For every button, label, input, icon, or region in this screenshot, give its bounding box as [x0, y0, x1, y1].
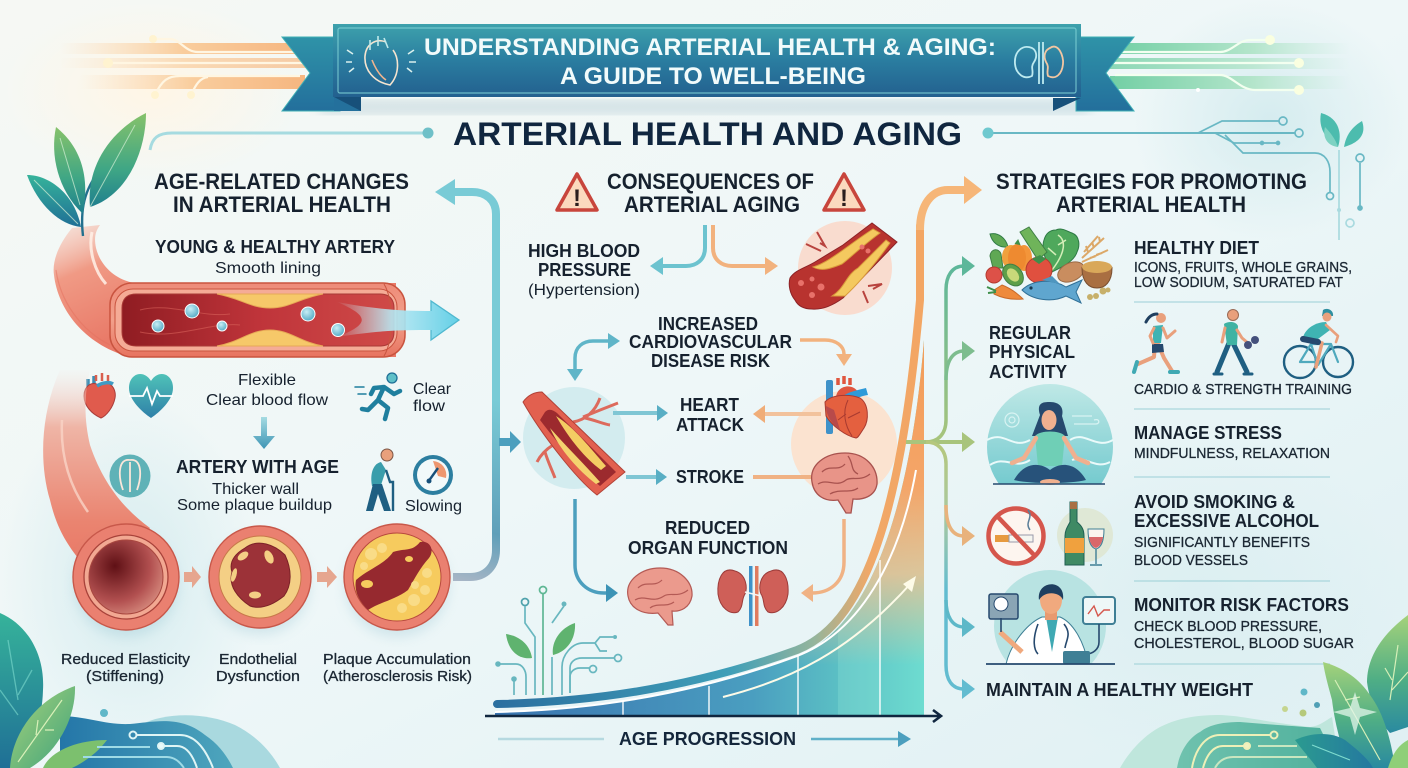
cross-section: endothelial dysfunction	[209, 526, 311, 635]
icon: green sprout	[27, 113, 146, 236]
monitor risk factors text	[1134, 595, 1354, 652]
increased cvd risk text: CARDIOVASCULAR	[629, 332, 792, 352]
reduced organ function text	[628, 518, 788, 558]
dark teal leaf	[0, 613, 43, 768]
circuit decoration top right	[982, 117, 1364, 240]
monitor risk factors text: CHOLESTEROL, BLOOD SUGAR	[1134, 635, 1354, 652]
icon: warning right	[824, 174, 864, 212]
healthy diet text: HEALTHY DIET	[1134, 238, 1259, 258]
cross-section captions: Reduced Elasticity	[61, 651, 191, 668]
title banner: A GUIDE TO WELL-BEING	[560, 63, 866, 90]
avoid smoking text: SIGNIFICANTLY BENEFITS	[1134, 534, 1310, 551]
panel heading: IN ARTERIAL HEALTH	[173, 192, 391, 217]
artery with age text: ARTERY WITH AGE	[176, 457, 339, 477]
arrow: changes back up to heading	[435, 179, 496, 577]
cross-section: plaque accumulation	[344, 524, 450, 637]
title banner	[282, 24, 1134, 114]
arrow: to high blood pressure	[650, 225, 705, 275]
cross-section captions: Dysfunction	[216, 668, 300, 685]
arrow: down to artery with age	[253, 417, 275, 449]
monitor risk factors text: MONITOR RISK FACTORS	[1134, 595, 1349, 615]
left glowing rays	[60, 35, 310, 99]
panel heading: CONSEQUENCES OF	[607, 169, 814, 194]
icon: no smoking	[988, 508, 1044, 564]
icon: small heart	[84, 373, 115, 418]
icon: heart with pulse	[129, 374, 173, 418]
apple	[986, 267, 1002, 283]
regular physical activity text: REGULAR	[989, 323, 1071, 343]
age progression label: AGE PROGRESSION	[619, 729, 796, 749]
icon: doctor monitoring	[986, 570, 1116, 665]
decoration: bottom right foliage	[1120, 615, 1408, 768]
icon: small teal leaves top right	[1320, 113, 1363, 147]
flexible text: Clear blood flow	[206, 392, 328, 409]
panel heading	[996, 169, 1307, 217]
tomato	[1026, 257, 1052, 283]
artery with age text: Some plaque buildup	[177, 497, 332, 514]
arrows: artery to heart attack and stroke	[613, 405, 668, 485]
banner title text: UNDERSTANDING ARTERIAL HEALTH & AGING:	[424, 34, 996, 61]
cross-section captions: (Atherosclerosis Risk)	[323, 668, 472, 685]
icon: warning left: !	[573, 185, 581, 212]
avoid smoking text: BLOOD VESSELS	[1134, 552, 1248, 569]
circuit lines	[83, 732, 213, 768]
increased cvd risk text: DISEASE RISK	[651, 351, 770, 371]
healthy diet text: ICONS, FRUITS, WHOLE GRAINS,	[1134, 259, 1352, 276]
wheat	[1082, 236, 1108, 262]
manage stress text: MINDFULNESS, RELAXATION	[1134, 445, 1330, 462]
icon: brain	[812, 453, 877, 513]
big light leaf	[1323, 662, 1395, 768]
cucumber	[1020, 227, 1047, 260]
icon: anatomical heart	[825, 376, 868, 438]
cross-section captions: (Stiffening)	[86, 668, 164, 685]
icon: walker with dumbbell	[1214, 310, 1259, 374]
artery with age text	[176, 457, 339, 514]
rising curve	[497, 226, 920, 704]
high blood pressure text	[528, 241, 640, 299]
sparkle	[1333, 692, 1377, 735]
young healthy artery heading	[155, 237, 395, 277]
dividers	[1134, 302, 1330, 664]
carrot	[994, 285, 1023, 299]
arrow: orange to kidneys	[801, 519, 844, 602]
area under curve	[495, 340, 924, 716]
maintain weight text: MAINTAIN A HEALTHY WEIGHT	[986, 680, 1253, 700]
heart attack and stroke text: HEART	[680, 395, 739, 415]
icon: vessel badge	[110, 454, 150, 498]
icon: runner	[1134, 313, 1178, 372]
clear flow text	[413, 381, 452, 415]
chart: age progression curve	[485, 226, 941, 722]
avoid smoking text: EXCESSIVE ALCOHOL	[1134, 511, 1319, 531]
icon: elderly person with cane	[366, 449, 393, 511]
arrow: flow out of artery	[337, 301, 459, 340]
orange pepper	[1002, 245, 1020, 269]
icon: small brain	[628, 568, 692, 625]
avocado	[998, 260, 1028, 290]
fish	[1022, 280, 1082, 303]
circle behind artery	[523, 387, 625, 489]
icon: kidneys	[718, 566, 788, 626]
avoid smoking text	[1134, 492, 1319, 569]
corner leaf	[1388, 740, 1408, 768]
arrow: orange to strategies	[920, 176, 982, 230]
clear flow text: flow	[413, 398, 446, 415]
decoration: bottom left foliage	[0, 613, 280, 768]
icon: gauge	[413, 455, 453, 495]
leaf top left	[990, 234, 1008, 247]
upper right leaf	[1367, 615, 1408, 733]
flexible text	[206, 372, 328, 409]
small green vegetable	[990, 250, 1003, 268]
healthy diet text	[1134, 238, 1352, 291]
icon: kidneys outline	[1015, 42, 1063, 84]
circle behind organs	[791, 391, 897, 497]
icon: meditation	[987, 384, 1113, 485]
manage stress text: MANAGE STRESS	[1134, 423, 1282, 443]
avoid smoking text: AVOID SMOKING &	[1134, 492, 1295, 512]
cross-section: reduced elasticity	[73, 524, 179, 637]
cross-section captions	[61, 651, 472, 685]
bowl of grain	[1082, 264, 1112, 288]
right glowing rays	[1110, 35, 1350, 95]
heart attack and stroke text: STROKE	[676, 467, 744, 487]
icon: warning right: !	[840, 185, 848, 212]
lettuce	[1043, 229, 1079, 272]
heart attack and stroke text	[676, 395, 744, 487]
arrow: into consequences	[499, 431, 521, 453]
blood cells	[152, 304, 344, 336]
illustration: aging artery curve	[43, 370, 150, 575]
main heading: ARTERIAL HEALTH AND AGING	[453, 116, 962, 152]
reduced organ function text: REDUCED	[665, 518, 750, 538]
yellow-green leaf	[10, 686, 75, 768]
circuit plant decoration	[495, 586, 622, 695]
horizontal axis arrow	[485, 710, 941, 722]
high blood pressure text: PRESSURE	[538, 260, 631, 280]
arrow: elasticity to dysfunction	[184, 566, 201, 588]
illustration: damaged artery	[789, 221, 897, 315]
high blood pressure text: HIGH BLOOD	[528, 241, 640, 261]
white contour	[495, 470, 916, 712]
icon: warning left	[557, 174, 597, 212]
cross-section captions: Endothelial	[219, 651, 297, 668]
high blood pressure text: (Hypertension)	[528, 282, 640, 299]
increased cvd risk text: INCREASED	[658, 314, 758, 334]
young healthy artery heading: YOUNG & HEALTHY ARTERY	[155, 237, 395, 257]
banner panel	[333, 24, 1081, 97]
heart attack and stroke text: ATTACK	[676, 415, 744, 435]
cross-section captions: Plaque Accumulation	[323, 651, 471, 668]
arrow: bidirectional teal to risk	[567, 333, 620, 381]
increased cvd risk text	[629, 314, 792, 371]
lower small leaf	[43, 740, 107, 768]
nuts	[1087, 288, 1110, 300]
arrows: branch to strategies	[906, 256, 975, 699]
illustration: branching artery	[523, 392, 625, 495]
regular physical activity text: ACTIVITY	[989, 362, 1067, 382]
young healthy artery heading: Smooth lining	[215, 260, 321, 277]
panel heading: AGE-RELATED CHANGES	[154, 169, 409, 194]
arrow: risk to heart	[800, 340, 852, 366]
heading connector left	[150, 128, 434, 150]
right panel: strategies	[986, 169, 1354, 700]
centre panel: consequences	[523, 169, 897, 626]
blue wave	[60, 716, 233, 768]
icon: heart outline	[346, 36, 416, 85]
icon: cyclist	[1284, 309, 1353, 378]
icon: running figure	[355, 373, 400, 419]
panel heading	[154, 169, 409, 217]
arrow: teal to brain	[575, 499, 618, 602]
arrow: dysfunction to plaque	[317, 566, 337, 588]
icon: healthy food	[986, 227, 1112, 303]
panel heading	[607, 169, 814, 217]
left ribbon tail	[282, 37, 361, 111]
left panel: age-related changes	[27, 113, 472, 685]
panel heading: ARTERIAL AGING	[624, 192, 800, 217]
arrow: to damaged artery	[713, 225, 778, 275]
pale wave	[1120, 715, 1340, 768]
circuit lines	[1192, 732, 1307, 768]
dark leaf	[1295, 734, 1373, 768]
reduced organ function text: ORGAN FUNCTION	[628, 538, 788, 558]
green wave	[1177, 722, 1340, 768]
age progression label	[498, 729, 911, 749]
clear flow text: Clear	[413, 381, 452, 398]
healthy diet text: LOW SODIUM, SATURATED FAT	[1134, 274, 1343, 291]
white arrow	[723, 582, 912, 697]
panel heading: STRATEGIES FOR PROMOTING	[996, 169, 1307, 194]
icon: wine bottle and glass	[1057, 502, 1113, 565]
regular physical activity text: PHYSICAL	[989, 342, 1075, 362]
bread	[1055, 258, 1087, 286]
cardio and strength text: CARDIO & STRENGTH TRAINING	[1134, 381, 1352, 398]
slowing label: Slowing	[405, 498, 462, 515]
arrows: organs to heart attack and stroke	[753, 405, 821, 479]
flexible text: Flexible	[238, 372, 296, 389]
artery with age text: Thicker wall	[212, 481, 299, 498]
regular physical activity text	[989, 323, 1075, 382]
right ribbon tail	[1053, 37, 1134, 111]
pale wave	[140, 715, 280, 768]
dots	[1282, 688, 1320, 716]
panel heading: ARTERIAL HEALTH	[1056, 192, 1246, 217]
monitor risk factors text: CHECK BLOOD PRESSURE,	[1134, 618, 1322, 635]
illustration: healthy artery	[54, 225, 405, 357]
manage stress text	[1134, 423, 1330, 462]
